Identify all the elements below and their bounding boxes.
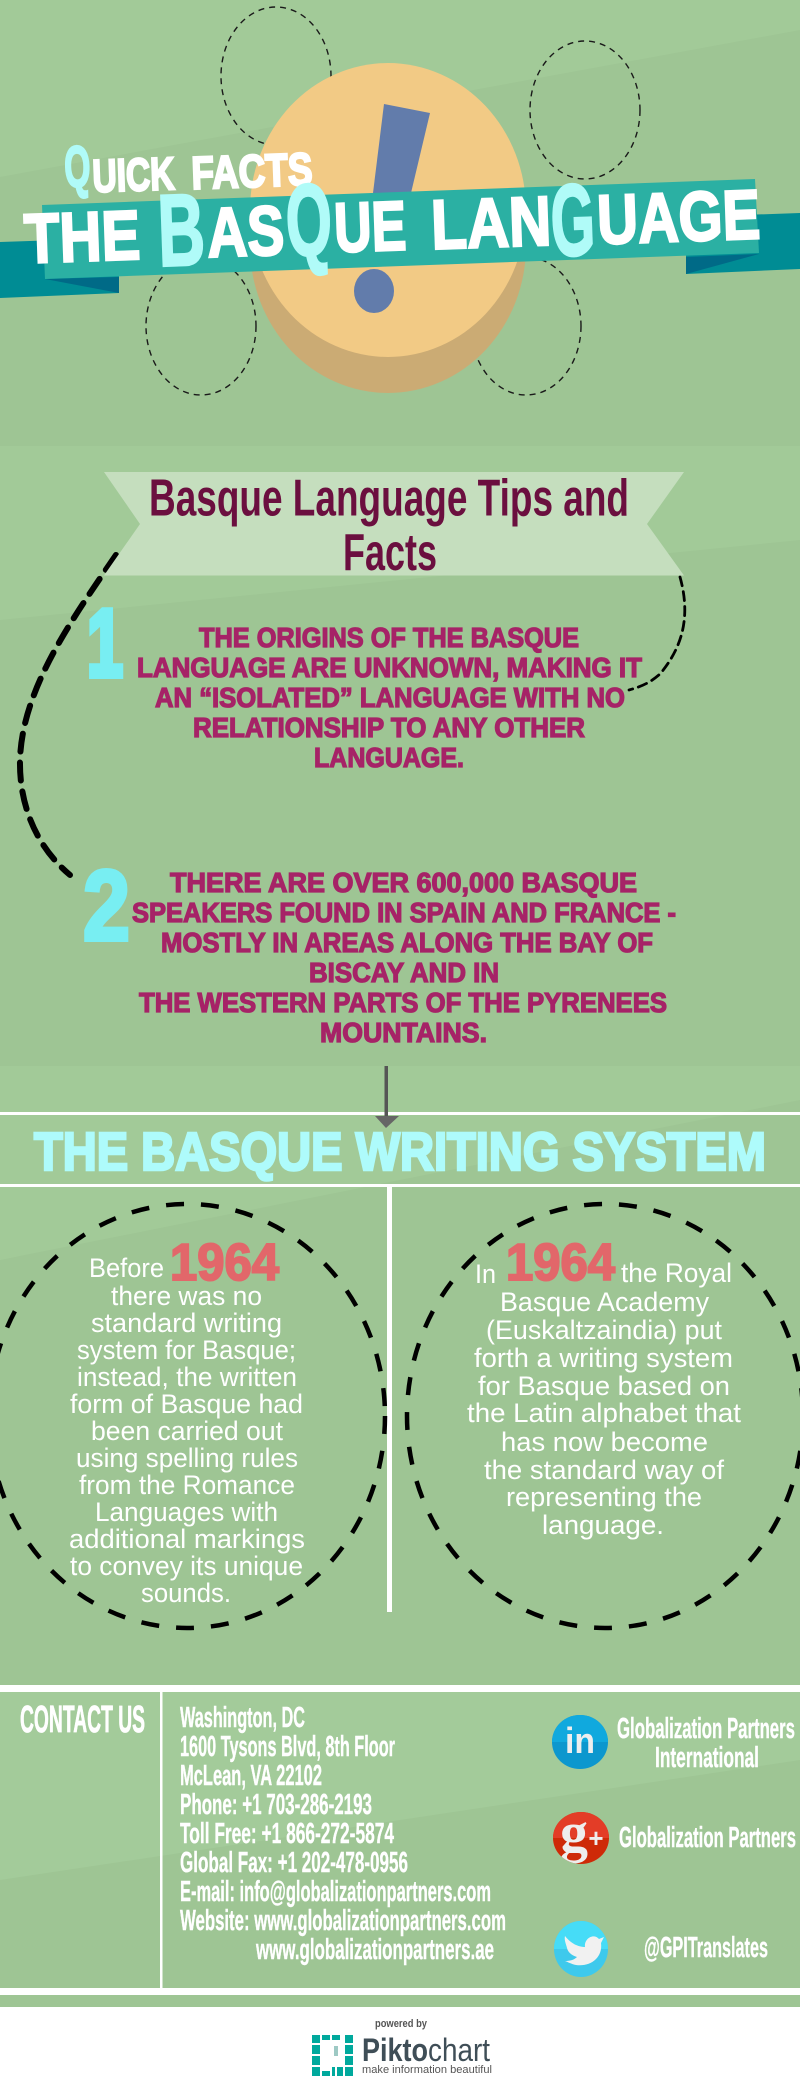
title: the Basque language: AS — [206, 191, 285, 272]
in 1964 text: has now become — [501, 1427, 708, 1457]
before 1964 text: from the Romance — [79, 1470, 295, 1500]
footer: powered by Piktochart: Pikto — [362, 2032, 428, 2068]
before 1964 text: sounds. — [141, 1578, 231, 1608]
footer: powered by Piktochart — [312, 2018, 492, 2076]
contact address: 1600 Tysons Blvd, 8th Floor — [180, 1731, 395, 1763]
fact 1 text: LANGUAGE ARE UNKNOWN, MAKING IT — [137, 652, 642, 683]
fact 1 text: LANGUAGE. — [314, 742, 464, 773]
in 1964 text: language. — [542, 1510, 664, 1540]
fact 2 text — [132, 867, 676, 1048]
icon: linkedin: in — [565, 1720, 595, 1761]
linkedin label — [617, 1713, 795, 1774]
big orange circle with exclamation mark — [250, 63, 526, 393]
before 1964 text: additional markings — [69, 1524, 305, 1554]
fact 1 text: RELATIONSHIP TO ANY OTHER — [193, 712, 585, 743]
title: quick facts: UICK — [92, 147, 175, 202]
contact panel frame lines — [0, 1685, 800, 1995]
contact address: McLean, VA 22102 — [180, 1760, 322, 1792]
title: the Basque language — [23, 162, 761, 288]
number 1: 1 — [87, 590, 123, 697]
fact 2 text: THERE ARE OVER 600,000 BASQUE — [170, 867, 637, 898]
in 1964 text: 1964 — [506, 1234, 615, 1292]
before 1964 text: instead, the written — [77, 1362, 297, 1392]
fact 1 text: AN “ISOLATED” LANGUAGE WITH NO — [155, 682, 625, 713]
in 1964 text: the standard way of — [484, 1455, 724, 1485]
in 1964 text: (Euskaltzaindia) put — [486, 1315, 722, 1345]
arrow — [375, 1066, 399, 1128]
title: the Basque language: B — [156, 172, 207, 288]
fact 2 text: MOUNTAINS. — [320, 1017, 487, 1048]
in 1964 text: for Basque based on — [478, 1371, 730, 1401]
title ribbon — [0, 179, 800, 298]
in 1964 text — [467, 1234, 742, 1540]
dashed connector arcs — [20, 555, 685, 875]
footer: powered by Piktochart: chart — [428, 2032, 490, 2068]
footer: powered by Piktochart: make information beautiful — [362, 2064, 492, 2076]
contact address: Washington, DC — [180, 1702, 305, 1734]
section divider lines — [0, 1112, 800, 1612]
icon: linkedin — [552, 1715, 608, 1769]
contact address: Phone: +1 703-286-2193 — [180, 1789, 372, 1821]
section banner: Facts — [343, 524, 437, 582]
before 1964 text: using spelling rules — [76, 1443, 298, 1473]
fact 1 text — [137, 622, 642, 773]
title: quick facts: FACTS — [191, 143, 313, 199]
before 1964 text: there was no — [111, 1281, 262, 1311]
in 1964 text: In — [475, 1259, 496, 1289]
in 1964 text: forth a writing system — [474, 1343, 733, 1373]
icon: twitter — [554, 1921, 608, 1977]
title: the Basque language: UE — [333, 187, 407, 267]
contact address: www.globalizationpartners.ae — [255, 1934, 494, 1966]
icon: google plus: g — [560, 1802, 588, 1864]
before 1964 text: Before — [89, 1253, 164, 1283]
in 1964 text: representing the — [506, 1482, 702, 1512]
contact address: E-mail: info@globalizationpartners.com — [180, 1876, 491, 1908]
title: the Basque language: LAN — [430, 182, 552, 264]
fact 2 text: BISCAY AND IN — [309, 957, 499, 988]
before 1964 text: to convey its unique — [70, 1551, 303, 1581]
dashed circle left — [0, 1204, 385, 1628]
before 1964 text: 1964 — [170, 1234, 279, 1292]
fact 2 text: MOSTLY IN AREAS ALONG THE BAY OF — [161, 927, 653, 958]
contact address: Website: www.globalizationpartners.com — [180, 1905, 506, 1937]
title: quick facts — [63, 134, 313, 202]
icon: google plus: + — [588, 1823, 604, 1853]
contact us heading: CONTACT US — [20, 1699, 145, 1741]
before 1964 text: been carried out — [91, 1416, 283, 1446]
title: the Basque language: UAGE — [596, 175, 761, 259]
in 1964 text: the Latin alphabet that — [467, 1398, 742, 1428]
dashed circle right — [407, 1204, 800, 1628]
fact 2 text: SPEAKERS FOUND IN SPAIN AND FRANCE - — [132, 897, 676, 928]
footer: powered by Piktochart: powered by — [375, 2018, 428, 2030]
before 1964 text: standard writing — [91, 1308, 282, 1338]
fact 2 text: THE WESTERN PARTS OF THE PYRENEES — [139, 987, 667, 1018]
contact address — [180, 1702, 506, 1966]
title: the Basque language: THE — [23, 196, 141, 278]
before 1964 text: form of Basque had — [70, 1389, 303, 1419]
icon: google plus — [553, 1812, 609, 1864]
contact address: Toll Free: +1 866-272-5874 — [180, 1818, 394, 1850]
contact address: Global Fax: +1 202-478-0956 — [180, 1847, 408, 1879]
in 1964 text: Basque Academy — [500, 1287, 709, 1317]
fact 1 text: THE ORIGINS OF THE BASQUE — [199, 622, 579, 653]
before 1964 text: system for Basque; — [77, 1335, 296, 1365]
title: the Basque language: Q — [284, 162, 334, 278]
in 1964 text: the Royal — [621, 1258, 732, 1288]
dashed ellipses behind title — [146, 7, 640, 395]
section banner — [104, 470, 684, 582]
title: quick facts: Q — [63, 134, 91, 200]
number 2: 2 — [83, 850, 130, 962]
before 1964 text — [69, 1234, 305, 1608]
title: the Basque language: G — [549, 163, 597, 278]
before 1964 text: Languages with — [95, 1497, 278, 1527]
